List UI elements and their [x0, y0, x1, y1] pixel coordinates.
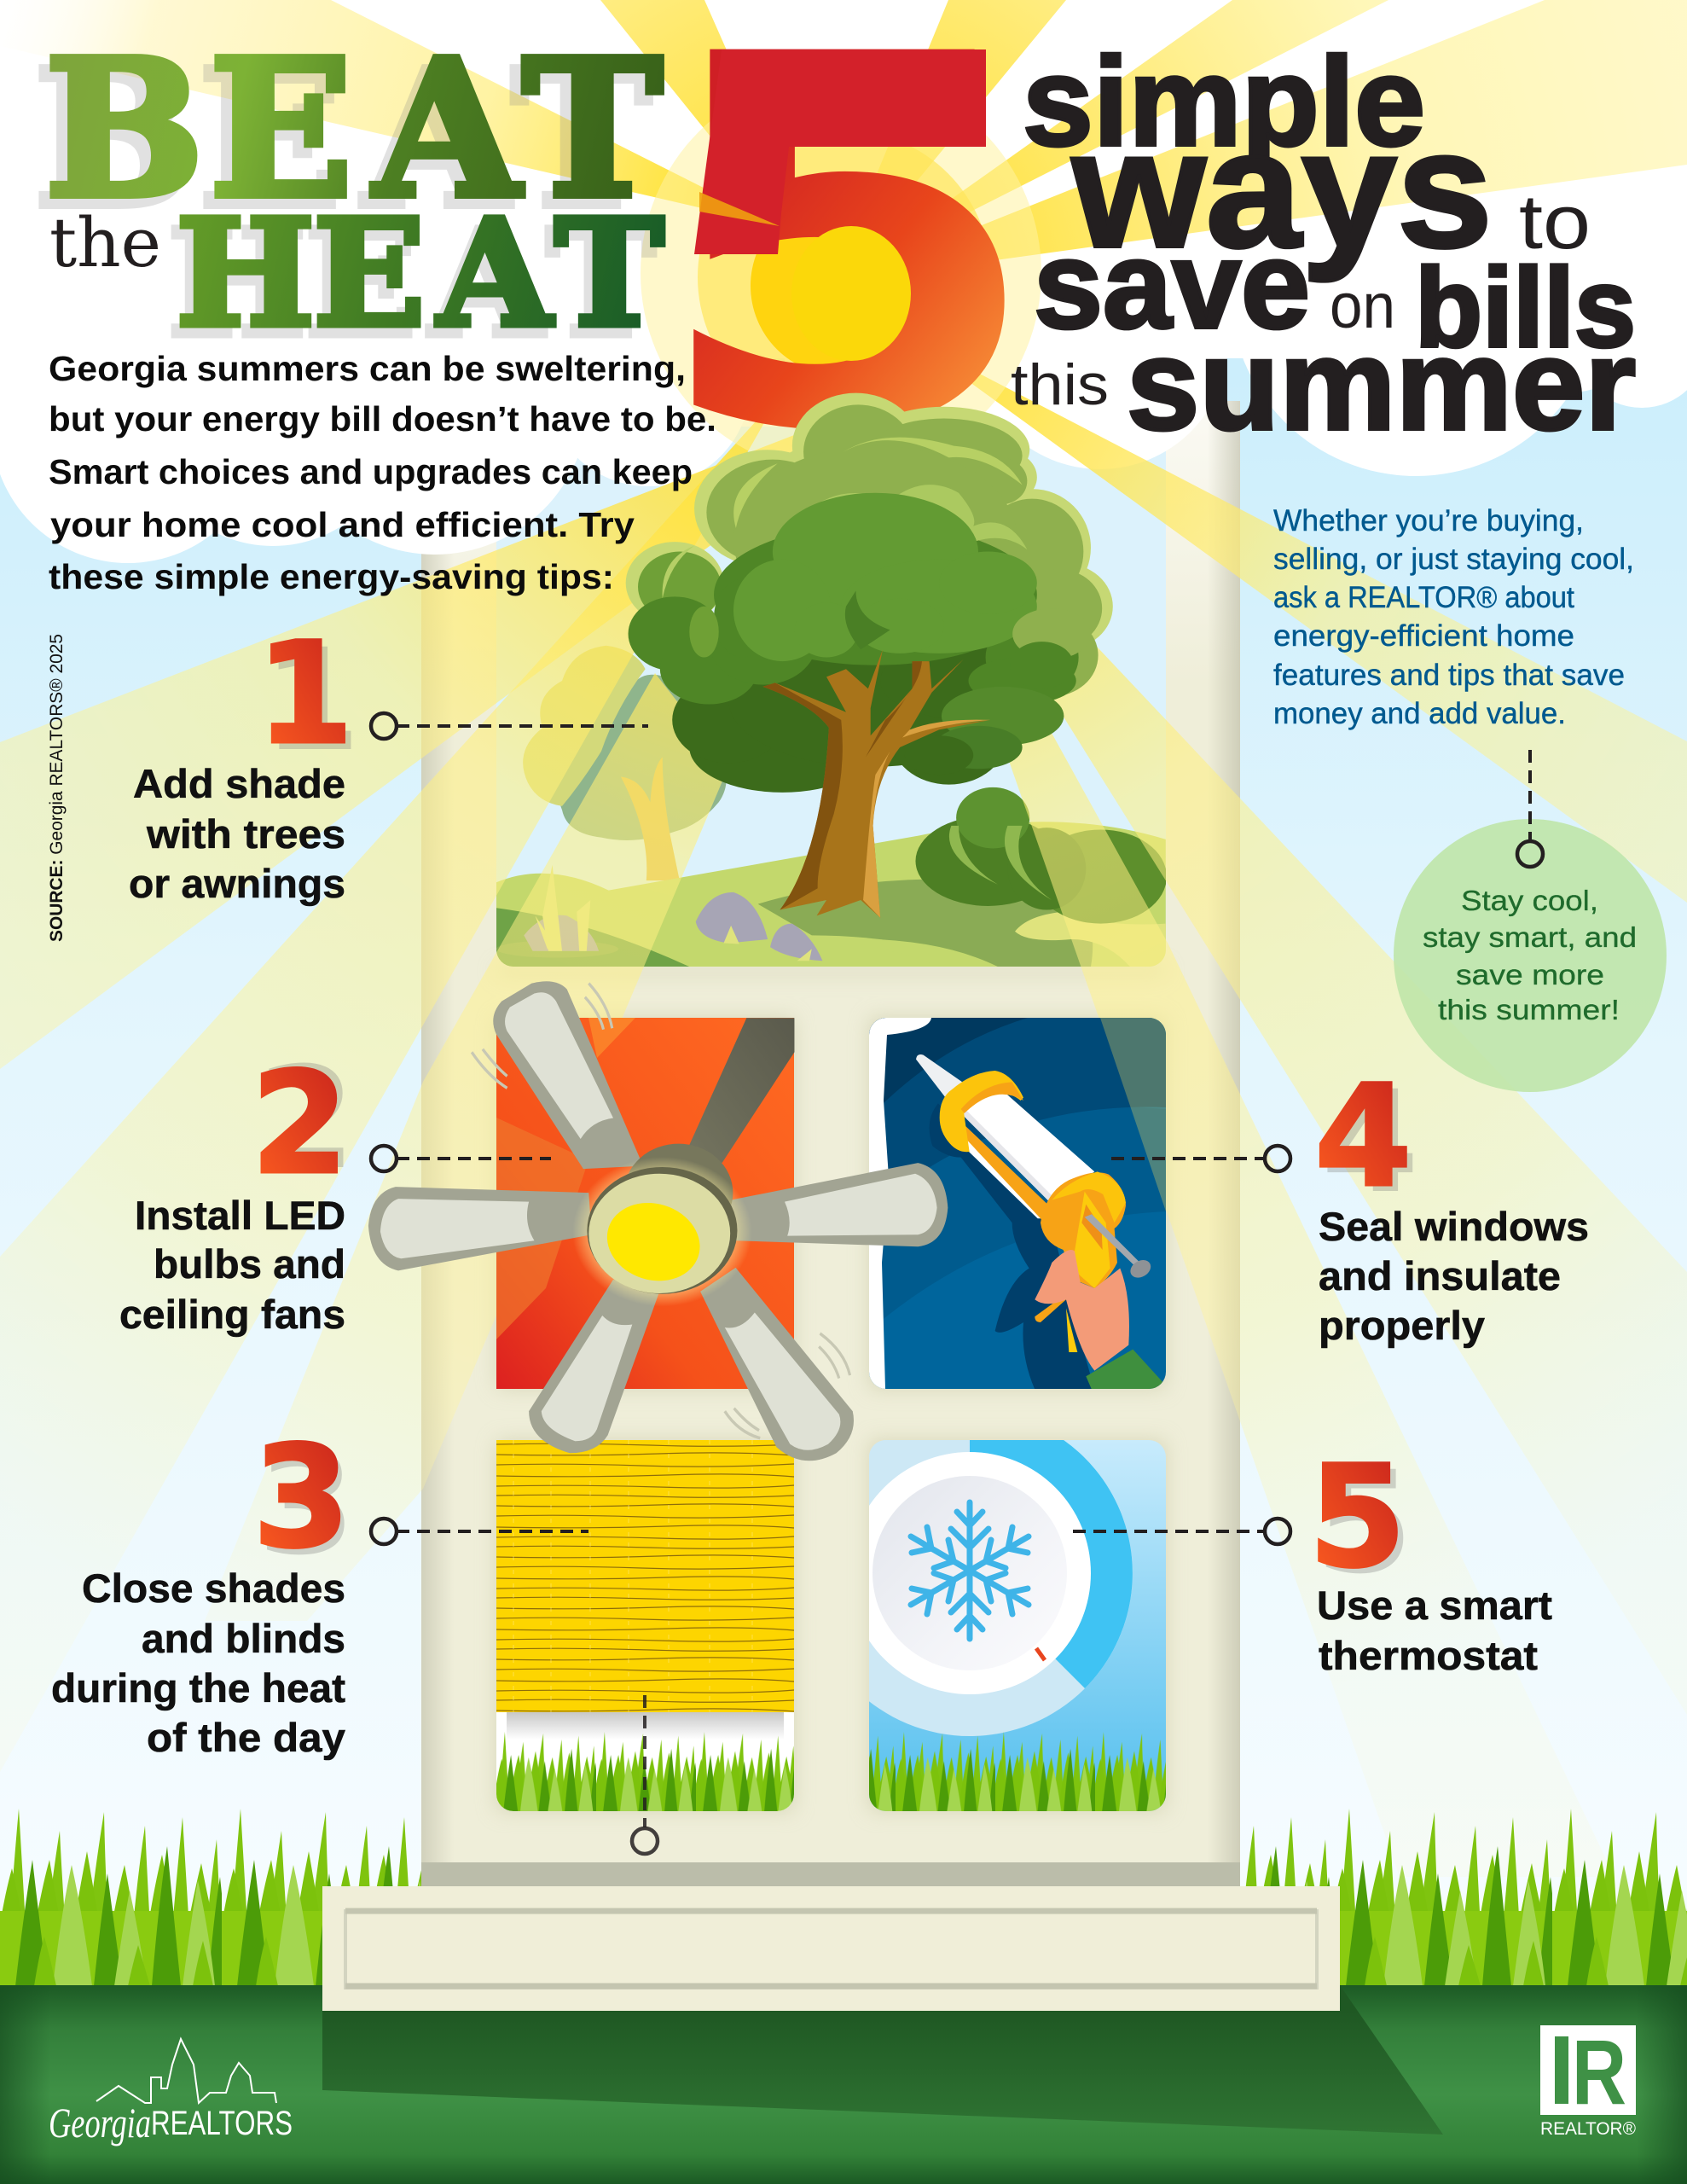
panel: thermostat	[869, 1440, 1166, 1811]
intro text: Smart choices and upgrades can keep	[49, 452, 693, 491]
logo: Georgia REALTORS: REALTORS	[151, 2105, 293, 2142]
fan hub and light	[572, 1144, 752, 1306]
crown mid	[629, 524, 1079, 705]
intro text: your home cool and efficient. Try	[50, 505, 635, 544]
back tree	[523, 646, 727, 880]
headline: 5 simple ways to save on bills this summer: to	[1519, 180, 1591, 265]
intro text: Georgia summers can be sweltering,	[49, 349, 686, 388]
tip 5: thermostat	[1319, 1633, 1538, 1678]
title: HEAT: HEAT	[167, 197, 656, 370]
tip 5: 5	[1308, 1435, 1406, 1599]
callout text: ask a realtor: Whether you’re buying,	[1273, 504, 1584, 537]
callout: stay cool bubble: stay smart, and	[1423, 921, 1637, 953]
shadow under sill	[322, 1985, 1443, 2135]
panel: caulk gun scene	[869, 1018, 1166, 1390]
rocks and tufts	[496, 865, 822, 961]
callout: stay cool bubble	[1394, 750, 1667, 1092]
headline: 5 simple ways to save on bills this summer: this	[1011, 352, 1109, 417]
callout: stay cool bubble: save more	[1456, 959, 1604, 990]
tip 3: and blinds	[142, 1616, 345, 1661]
tip 1: or awnings	[129, 861, 345, 906]
window frame	[421, 401, 1240, 1886]
crown right clumps	[905, 608, 1091, 775]
tip 3: 3	[252, 1415, 351, 1579]
tip 4: Seal windows	[1319, 1204, 1589, 1249]
tip 1: 1	[256, 612, 354, 775]
callout text: ask a realtor: selling, or just staying cool,	[1273, 543, 1634, 576]
tip 4	[1111, 1054, 1589, 1348]
hills	[496, 822, 1166, 967]
tip 5	[1073, 1435, 1552, 1678]
callout text: ask a realtor: energy-efficient home	[1273, 619, 1574, 653]
tip 4: properly	[1319, 1303, 1485, 1348]
logo: REALTOR R: R	[1572, 2020, 1626, 2123]
trunk	[762, 649, 990, 918]
callout text: ask a realtor: money and add value.	[1273, 697, 1566, 730]
crown highlights	[733, 438, 1023, 528]
illustration: ceiling fan	[368, 981, 948, 1461]
headline: 5 simple ways to save on bills this summer: bills	[1415, 245, 1636, 370]
headline: 5 simple ways to save on bills this summer: summer	[1127, 312, 1636, 457]
callout text: ask a realtor: features and tips that save	[1273, 659, 1625, 692]
tip 2: ceiling fans	[119, 1292, 345, 1337]
title: BEAT: BEAT	[33, 29, 652, 251]
tip 5: 5	[1315, 1441, 1413, 1605]
headline: 5 simple ways to save on bills this summer: on	[1330, 270, 1395, 341]
logo: Georgia REALTORS: Georgia	[49, 2099, 151, 2146]
clouds	[0, 0, 1687, 563]
crown shade	[672, 634, 1057, 793]
title: the: the	[49, 203, 161, 282]
tip 2: Install LED	[135, 1193, 345, 1238]
grass right	[1240, 1809, 1687, 1986]
tip 3: Close shades	[82, 1565, 345, 1611]
crown rim	[626, 393, 1113, 649]
icon: caulk gun and hand	[916, 1054, 1162, 1390]
illustration: big tree	[626, 393, 1113, 918]
tip 2: 2	[251, 1042, 349, 1205]
fan blades	[368, 981, 948, 1461]
dial	[849, 1452, 1091, 1694]
headline: 5 simple ways to save on bills this summer: simple	[1023, 32, 1425, 172]
tip 4: 4	[1314, 1054, 1412, 1218]
tip 1	[129, 612, 648, 906]
tip 4: 4	[1321, 1060, 1419, 1224]
tip 3: during the heat	[51, 1665, 345, 1711]
bush	[915, 787, 1167, 924]
callout: stay cool bubble: this summer!	[1438, 994, 1620, 1025]
title: HEAT: HEAT	[176, 187, 664, 360]
logo: REALTOR R	[1540, 2020, 1637, 2139]
intro text: these simple energy-saving tips:	[49, 557, 614, 596]
grass left	[0, 1809, 421, 1986]
tip 1: Add shade	[133, 761, 345, 806]
source note: SOURCE: Georgia REALTORS® 2025	[46, 634, 67, 942]
icon: snowflake	[911, 1502, 1029, 1639]
tip 2: 2	[258, 1037, 356, 1200]
window sill	[322, 1886, 1340, 2011]
headline: 5 simple ways to save on bills this summer	[1011, 32, 1636, 457]
tip 1: 1	[263, 619, 361, 782]
sun halo	[641, 73, 1041, 473]
tip 5: Use a smart	[1317, 1583, 1552, 1628]
tip 3: 3	[258, 1422, 356, 1586]
title: BEAT: BEAT	[44, 19, 663, 241]
tip 1: with trees	[146, 811, 345, 857]
headline: 5 simple ways to save on bills this summer: save	[1034, 215, 1310, 354]
headline: 5 simple ways to save on bills this summer: ways	[1071, 96, 1493, 282]
logo: REALTOR R: REALTOR®	[1540, 2119, 1637, 2139]
intro text	[49, 349, 716, 596]
crown main	[733, 493, 1037, 661]
panel: orange window behind fan	[496, 1018, 794, 1389]
tip 3: of the day	[147, 1715, 345, 1760]
callout text: ask a realtor	[1273, 504, 1634, 730]
panel: tree scene background	[496, 427, 1167, 967]
logo: Georgia REALTORS	[49, 2039, 293, 2146]
crown light layer	[706, 404, 1102, 696]
panel: window blind	[496, 1440, 794, 1812]
tip 2	[119, 1037, 551, 1337]
ground	[0, 1985, 1687, 2184]
tip 3	[51, 1415, 658, 1854]
callout: stay cool bubble: Stay cool,	[1461, 885, 1598, 916]
tip 2: bulbs and	[154, 1241, 345, 1287]
tip 4: and insulate	[1319, 1253, 1561, 1298]
callout text: ask a realtor: ask a REALTOR® about	[1273, 581, 1574, 614]
intro text: but your energy bill doesn’t have to be.	[49, 399, 716, 439]
